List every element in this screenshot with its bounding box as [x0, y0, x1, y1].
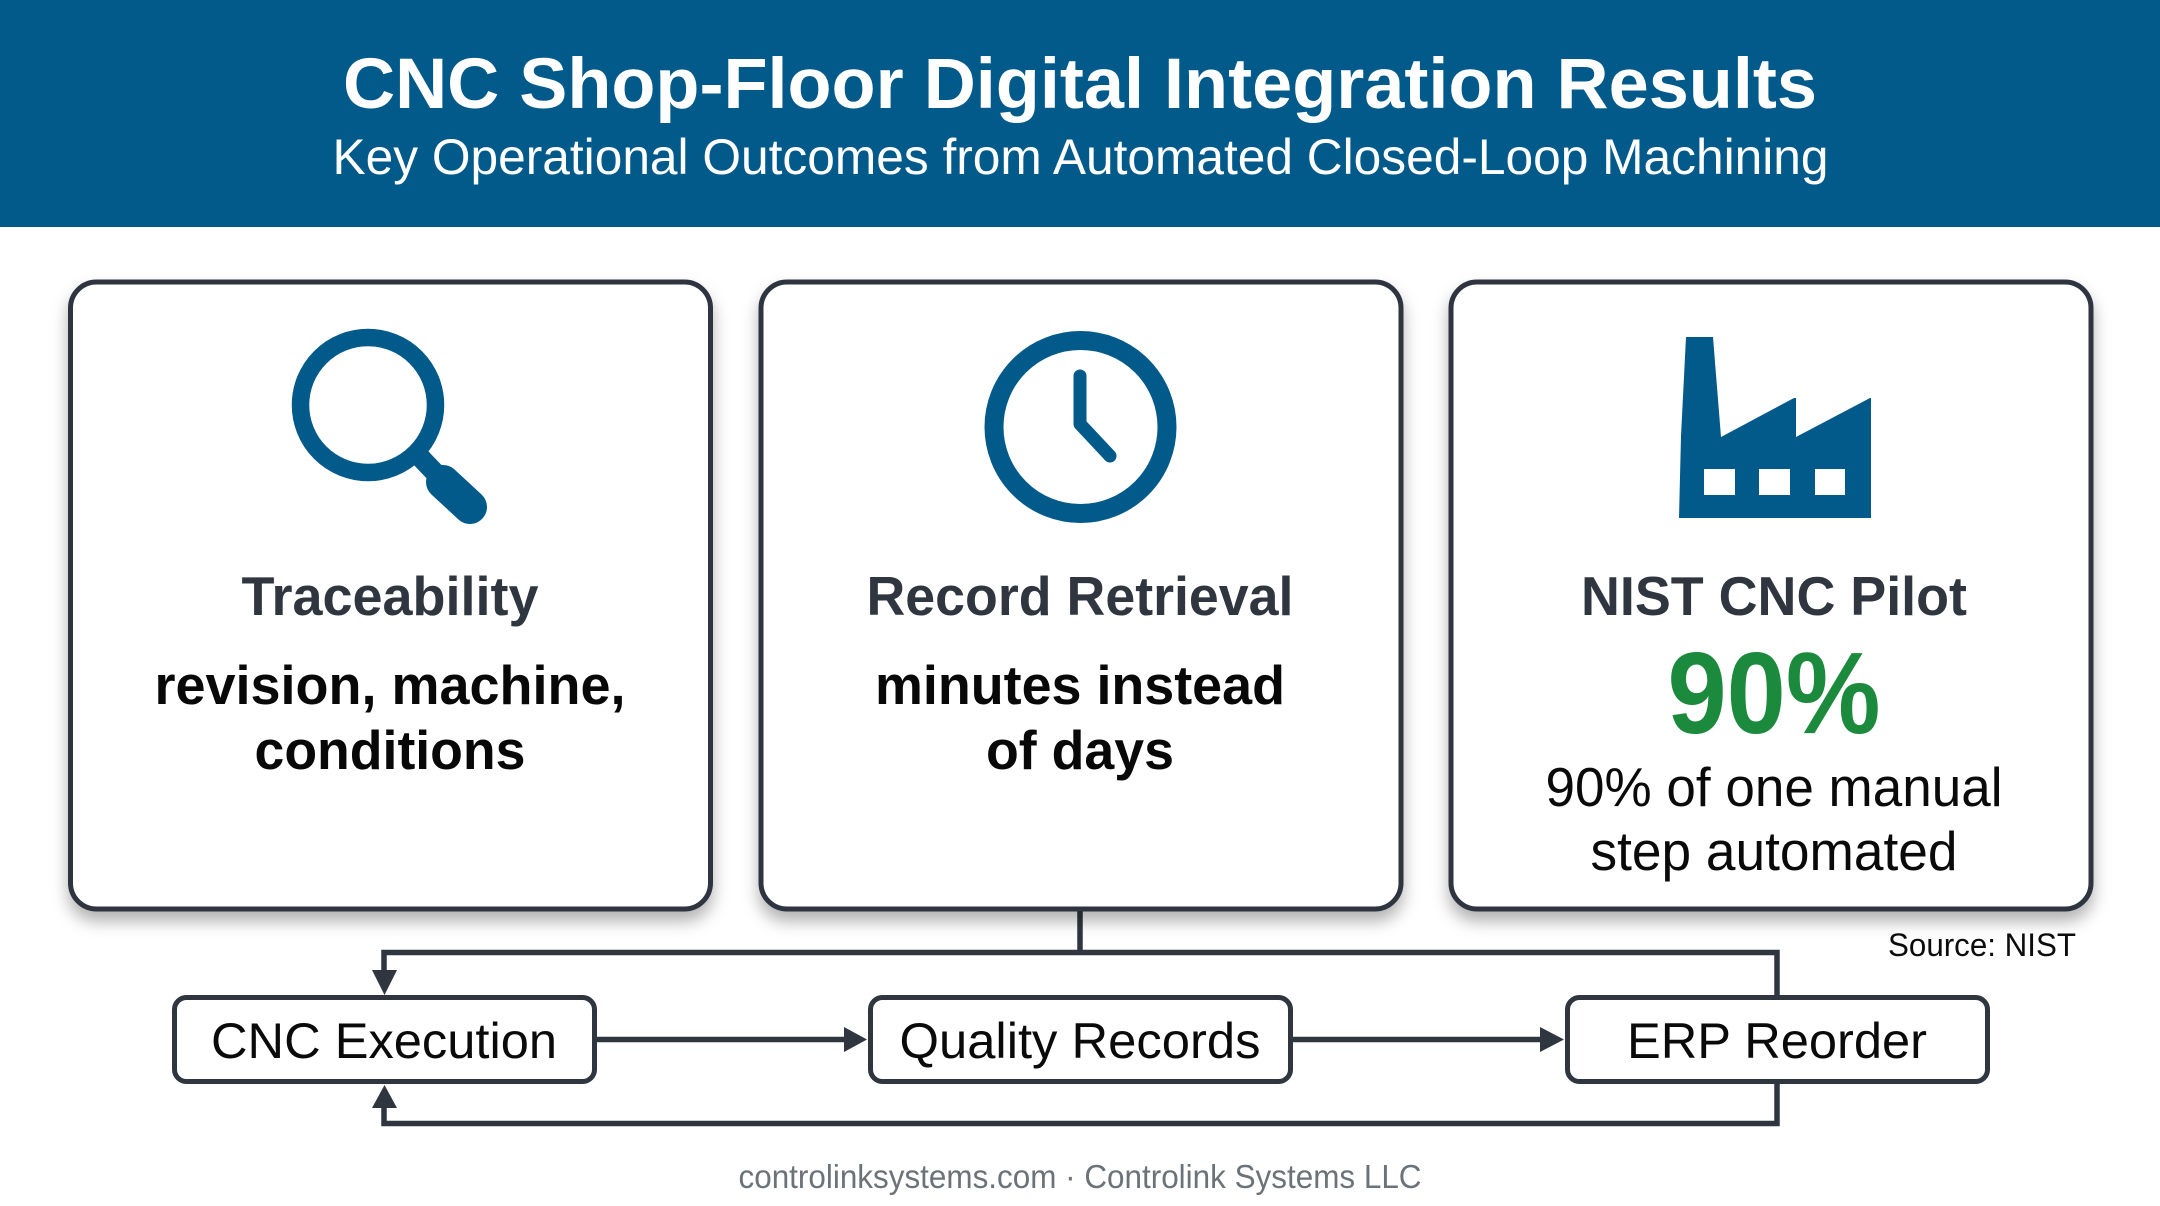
value: traceability: conditions [254, 719, 526, 781]
source note: Source: NIST [1888, 927, 2076, 963]
header banner [0, 0, 2160, 227]
footer: controlinksystems.com · Controlink Systems LLC [738, 1158, 1422, 1195]
heading: record retrieval: Record Retrieval [866, 565, 1294, 627]
icon: magnifying glass [300, 338, 470, 507]
heading: traceability: Traceability [242, 565, 539, 627]
title: CNC Shop-Floor Digital Integration Results [343, 45, 1817, 124]
flow connector: record retrieval feedback line to CNC Execution [372, 909, 1777, 996]
flow box: Quality Records: Quality Records [900, 1013, 1260, 1069]
icon: factory [1679, 337, 1871, 518]
flow box: CNC Execution [174, 998, 594, 1082]
flow connector: ERP Reorder loop back to CNC Execution [372, 1083, 1777, 1124]
arrow: CNC Execution to Quality Records [595, 1027, 867, 1052]
description: NIST pilot: step automated [1590, 820, 1958, 882]
panel: traceability [70, 282, 710, 909]
value: traceability [154, 654, 626, 781]
flow box: Quality Records [870, 998, 1290, 1082]
subtitle: Key Operational Outcomes from Automated Closed-Loop Machining [332, 129, 1828, 185]
description: NIST pilot [1546, 756, 2002, 882]
flow box: ERP Reorder [1568, 998, 1988, 1082]
arrow: Quality Records to ERP Reorder [1291, 1027, 1564, 1052]
value: record retrieval [875, 654, 1285, 781]
description: NIST pilot: 90% of one manual [1546, 756, 2002, 818]
big number: 90%: 90% [1668, 628, 1880, 758]
panel: NIST CNC pilot [1451, 282, 2091, 909]
flow box: ERP Reorder: ERP Reorder [1627, 1013, 1927, 1069]
value: traceability: revision, machine, [154, 654, 626, 716]
flow box: CNC Execution: CNC Execution [211, 1013, 557, 1069]
value: record retrieval: minutes instead [875, 654, 1285, 716]
icon: clock [994, 340, 1167, 514]
panel: record retrieval [761, 282, 1401, 909]
value: record retrieval: of days [986, 719, 1174, 781]
heading: NIST CNC pilot: NIST CNC Pilot [1581, 565, 1967, 627]
